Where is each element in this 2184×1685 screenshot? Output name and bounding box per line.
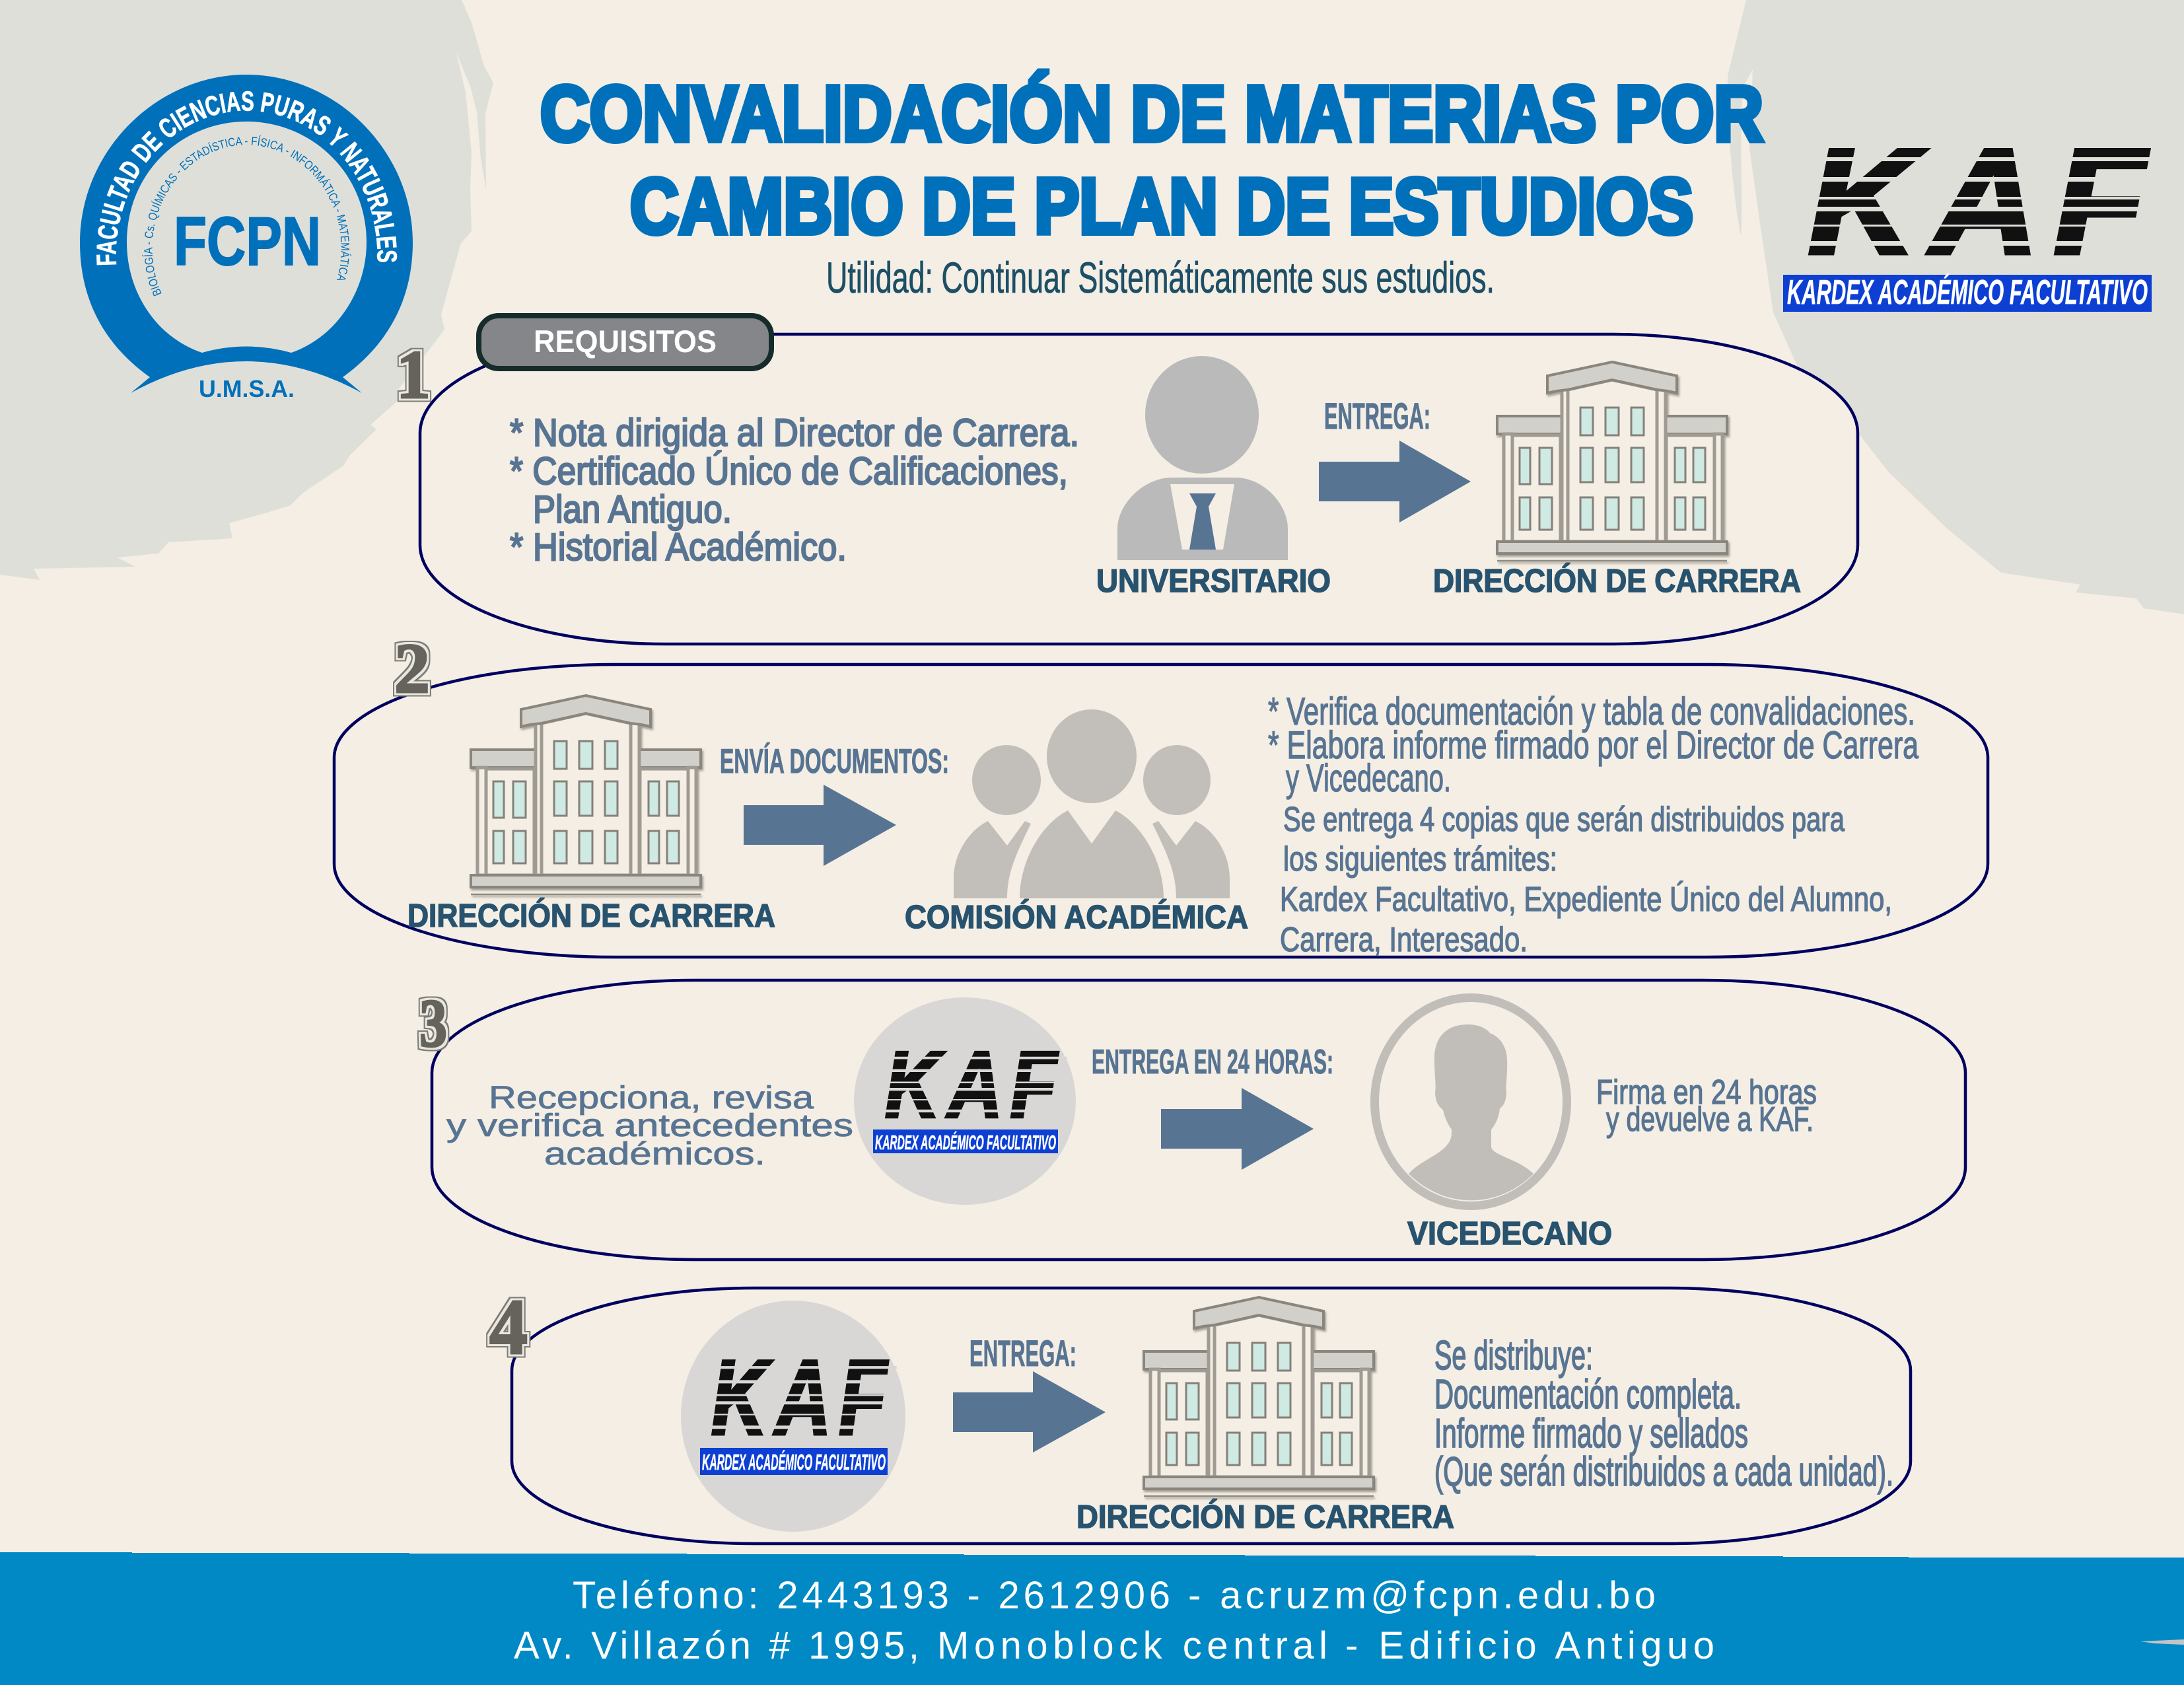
subtitle: Utilidad: Continuar Sistemáticamente sus estudios. [826, 253, 1495, 302]
step 2 description: * Elabora informe firmado por el Director de Carrera [1268, 724, 1919, 767]
panel 1: requisitos [396, 316, 1858, 644]
step number 1: 1 [396, 337, 431, 413]
title: CAMBIO DE PLAN DE ESTUDIOS [630, 162, 1693, 250]
arrow 1 [1319, 441, 1471, 522]
arrow 3 [1161, 1088, 1314, 1170]
label: direccion de carrera 2: DIRECCIÓN DE CARRERA [407, 898, 775, 934]
step number 3: 3 [419, 986, 447, 1061]
KAF badge step 3: KARDEX ACADÉMICO FACULTATIVO [875, 1131, 1056, 1154]
step 2 description: Kardex Facultativo, Expediente Único del Alumno, [1280, 880, 1892, 919]
step 2 description: * Verifica documentación y tabla de convalidaciones. [1268, 690, 1915, 733]
logo inner text: BIOLOGÍA - Cs. QUÍMICAS - ESTADÍSTICA - FÍSICA - INFORMÁTICA - MATEMÁTICA [142, 135, 351, 297]
requirements list: * Historial Académico. [510, 526, 847, 569]
vicedecano note: y devuelve a KAF. [1606, 1100, 1814, 1139]
panel 1 outline [420, 334, 1858, 644]
step number 2: 2 [394, 629, 430, 708]
label: universitario: UNIVERSITARIO [1096, 563, 1331, 599]
panel 3 outline [432, 980, 1965, 1260]
step 4 description: Se distribuye: [1434, 1333, 1593, 1379]
title [540, 70, 1763, 250]
panel 2 outline [334, 664, 1988, 957]
logo outer lettering [116, 110, 378, 266]
icon: building 1 [1497, 362, 1727, 561]
icon: student [1117, 356, 1288, 560]
panel 2: comision academica [334, 629, 1988, 959]
footer contact text: Teléfono: 2443193 - 2612906 [573, 1574, 1170, 1617]
step 2 description: Se entrega 4 copias que serán distribuidos para [1283, 801, 1845, 839]
step 3 description: y verifica antecedentes [446, 1108, 853, 1143]
label: entrega: ENTREGA: [1324, 395, 1430, 437]
label: envia documentos: ENVÍA DOCUMENTOS: [720, 742, 949, 781]
requisitos label: REQUISITOS [534, 324, 717, 359]
icon: building 2 [471, 696, 701, 894]
footer contact text: Monoblock central [937, 1624, 1327, 1667]
icon: building 3 [1144, 1297, 1374, 1496]
footer contact text: - acruzm@fcpn.edu.bo [1188, 1574, 1656, 1617]
step number 4: 4 [489, 1283, 528, 1371]
vicedecano note [1596, 1073, 1817, 1139]
step 3 description: Recepciona, revisa [489, 1081, 814, 1116]
title: CONVALIDACIÓN DE MATERIAS POR [540, 70, 1763, 158]
icon: vicedean portrait [1375, 997, 1567, 1206]
label: direccion de carrera 3: DIRECCIÓN DE CARRERA [1076, 1499, 1454, 1535]
panel 3: kardex y vicedecano [419, 980, 1965, 1260]
requirements list: * Nota dirigida al Director de Carrera. [510, 412, 1079, 454]
logo outer text: FACULTAD DE CIENCIAS PURAS Y NATURALES [96, 91, 398, 266]
footer band [0, 1552, 2184, 1685]
logo ring [80, 75, 413, 393]
KAF badge step 4: KAF [711, 1338, 888, 1456]
KAF badge step 3: KAF [885, 1033, 1059, 1137]
KAF badge step 3 [854, 997, 1076, 1205]
footer contact text: Av. Villazón # 1995, [514, 1624, 919, 1667]
logo inner lettering path [153, 145, 341, 294]
background brush shape: top right [1728, 0, 2184, 614]
label: direccion de carrera 1: DIRECCIÓN DE CARRERA [1433, 563, 1801, 599]
arrow 4 [953, 1371, 1106, 1452]
KAF badge step 4: KARDEX ACADÉMICO FACULTATIVO [702, 1450, 886, 1474]
step 3 description [446, 1081, 853, 1172]
footer contact text [514, 1574, 1714, 1667]
logo: KAF top right [1783, 118, 2165, 312]
label: vicedecano: VICEDECANO [1407, 1216, 1612, 1252]
step 2 description [1268, 690, 1919, 959]
arrow 2 [744, 785, 896, 866]
step 2 description: los siguientes trámites: [1283, 840, 1557, 878]
panel 4: distribucion [489, 1283, 1911, 1544]
background brush shape: top left [0, 0, 493, 580]
KAF badge step 4 [681, 1301, 905, 1532]
label: entrega: ENTREGA: [969, 1332, 1076, 1374]
logo UMSA: U.M.S.A. [199, 375, 295, 402]
KAF striped letters: KAF [1808, 118, 2148, 285]
step 2 description: Carrera, Interesado. [1280, 921, 1528, 959]
panel 4 outline [512, 1288, 1911, 1544]
requisitos tab [479, 316, 771, 369]
footer sliver [2140, 1639, 2184, 1645]
KAF blue band [1783, 275, 2152, 312]
step 3 description: académicos. [544, 1137, 765, 1172]
label: comision academica: COMISIÓN ACADÉMICA [905, 899, 1248, 935]
requirements list: Plan Antiguo. [533, 488, 732, 531]
label: entrega en 24 horas: ENTREGA EN 24 HORAS: [1092, 1043, 1333, 1081]
footer contact text: - Edificio Antiguo [1345, 1624, 1714, 1667]
logo: FCPN [80, 75, 413, 402]
requirements list: * Certificado Único de Calificaciones, [510, 450, 1068, 493]
logo FCPN wordmark: FCPN [174, 203, 321, 280]
step 4 description: Documentación completa. [1434, 1372, 1742, 1417]
step 4 description: (Que serán distribuidos a cada unidad). [1434, 1449, 1893, 1495]
step 4 description: Informe firmado y sellados [1434, 1411, 1748, 1456]
requirements list [510, 412, 1079, 569]
step 4 description [1434, 1333, 1893, 1495]
step 2 description: y Vicedecano. [1286, 757, 1451, 800]
icon: committee [954, 709, 1230, 898]
vicedecano note: Firma en 24 horas [1596, 1073, 1817, 1112]
